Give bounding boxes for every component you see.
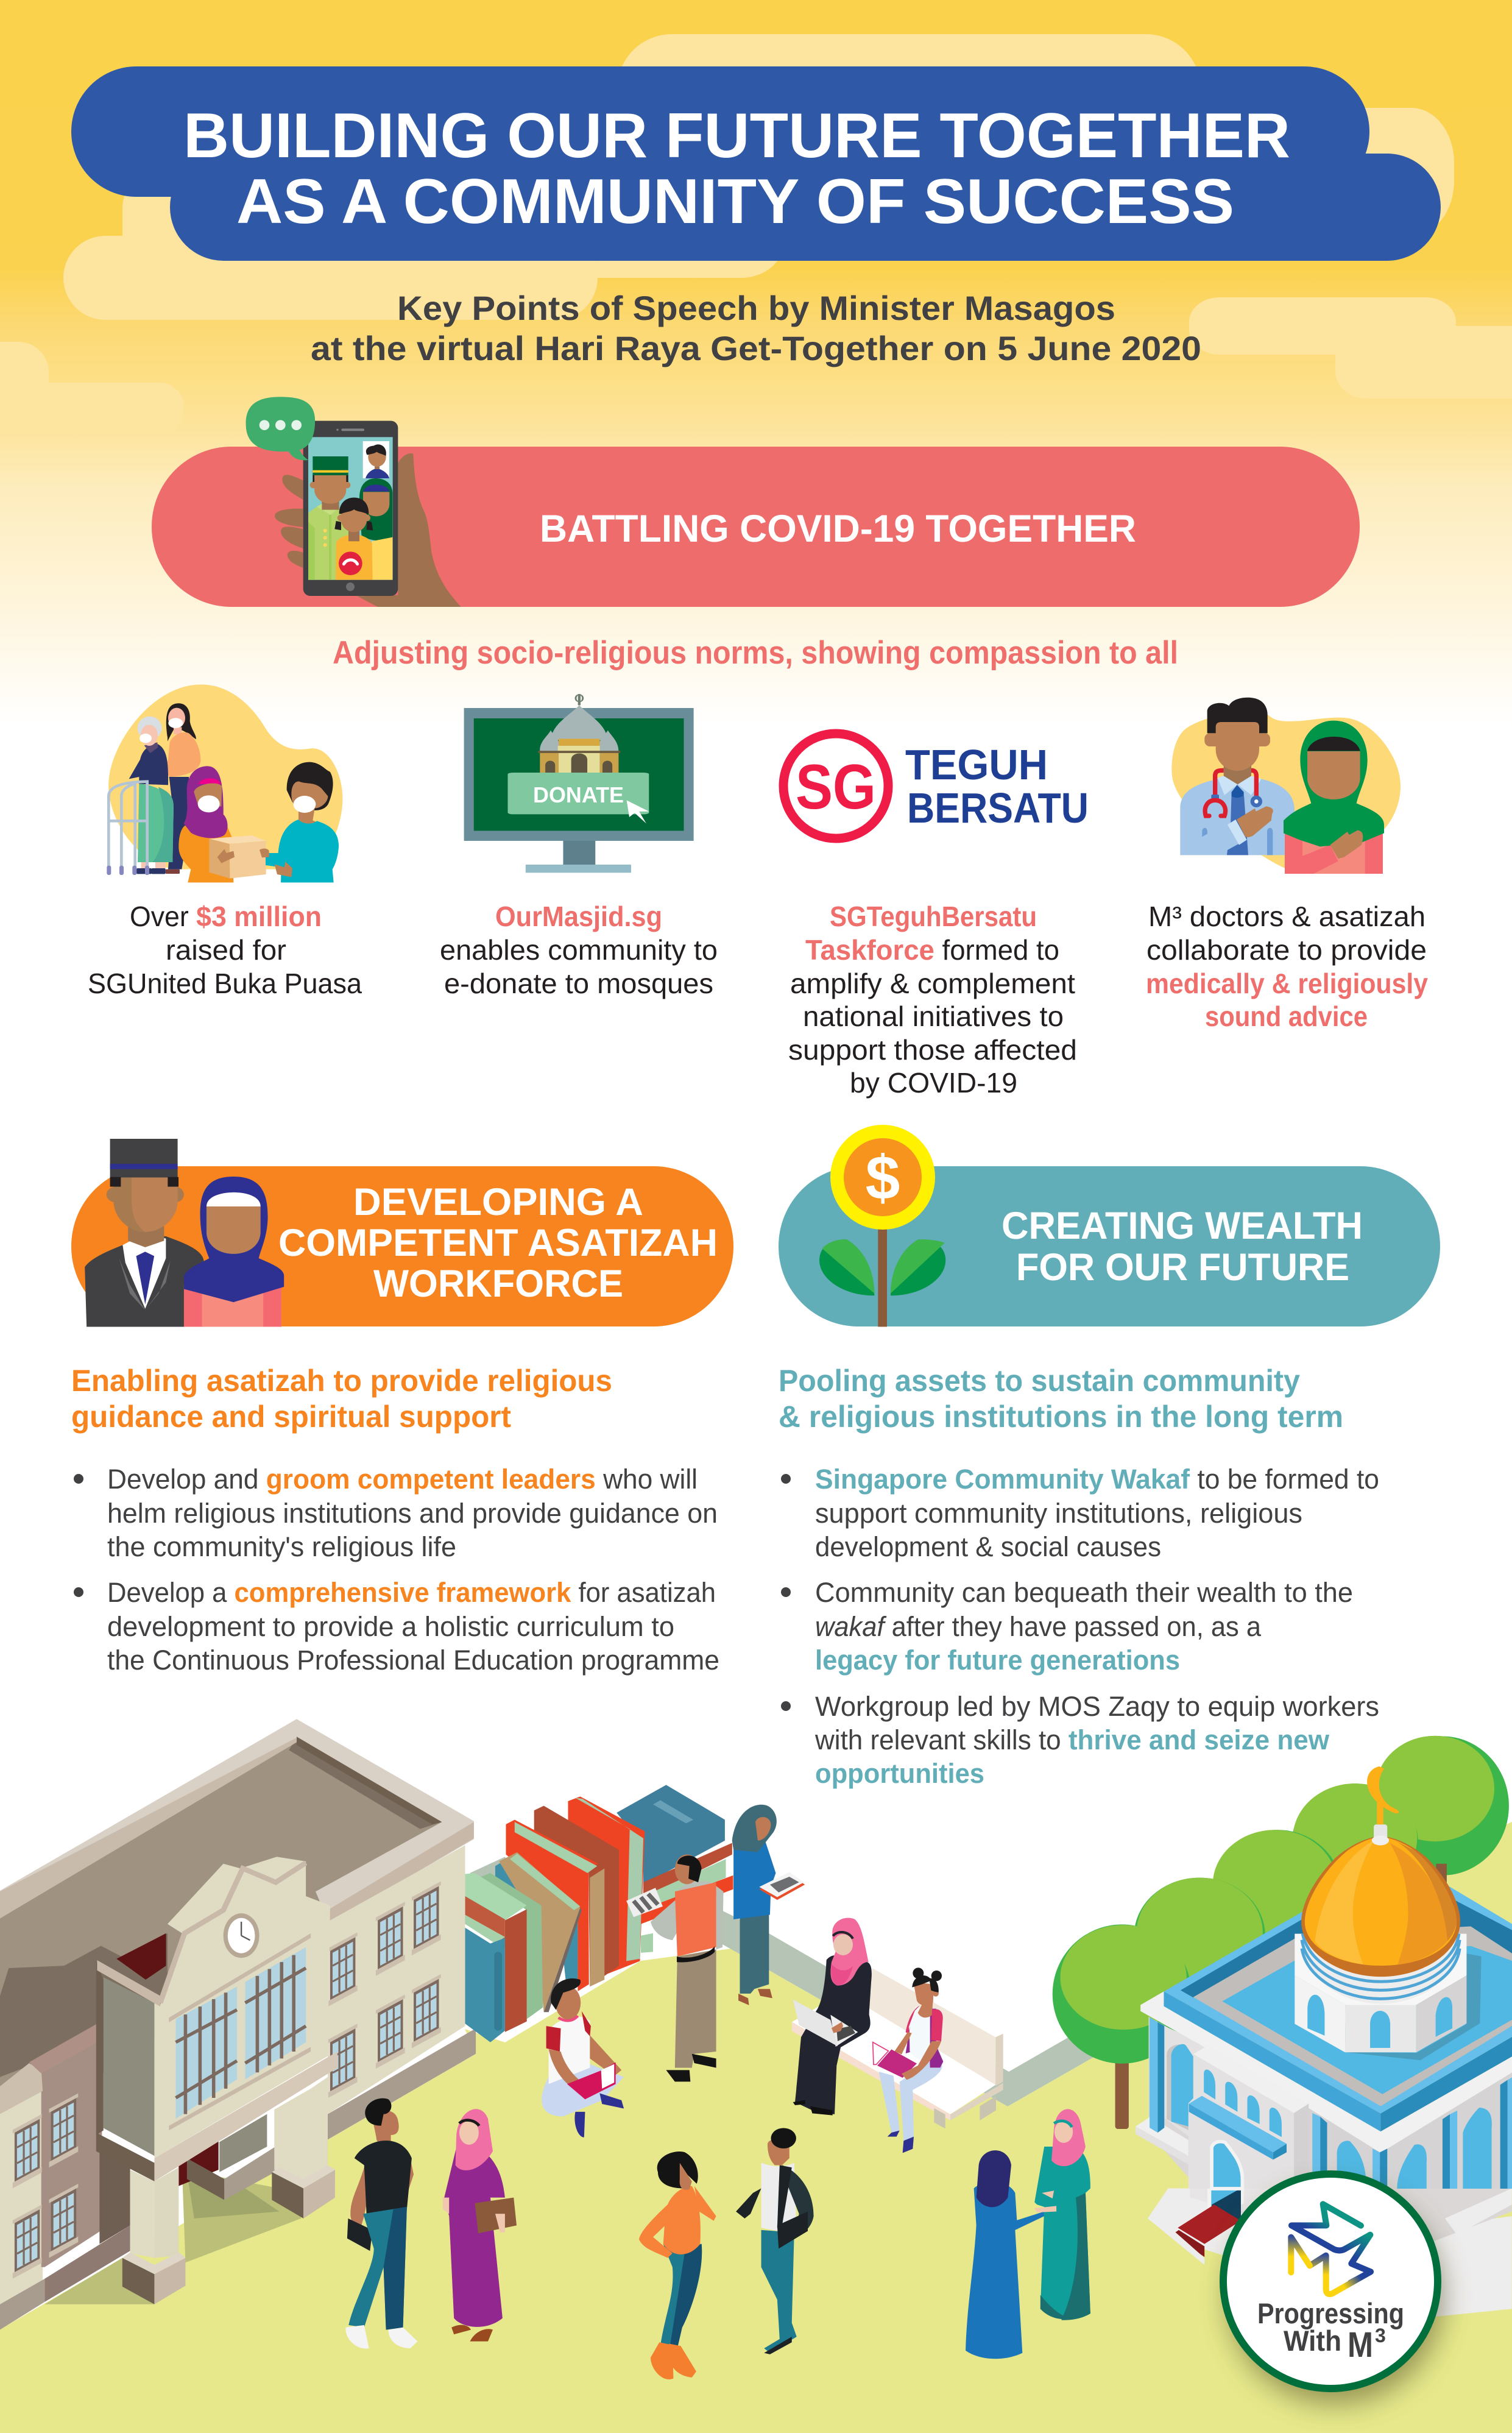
bullet list: asatizah development [74,1464,719,1676]
text: m3 doctors and asatizah: medically & religiously [1146,968,1428,999]
text: over $3 million raised: Over $3 million [130,901,322,932]
bullet list: wealth creation: with relevant skills to thrive and seize new [814,1724,1330,1755]
logo badge: progressing with m3: With [1284,2325,1341,2357]
bench with two seated women [792,1918,1003,2153]
title banner: BUILDING OUR FUTURE TOGETHER [183,101,1290,171]
subtitle [311,289,1201,367]
people: two women talking [966,2109,1090,2359]
banner: creating wealth for our future: CREATING WEALTH [1002,1205,1363,1247]
text: ourmasjid.sg: enables community to [440,934,718,966]
bullet list: asatizah development: Develop a comprehensive framework for asatizah [107,1577,716,1608]
bullet list: asatizah development: helm religious institutions and provide guidance on [107,1498,718,1529]
bullet list: wealth creation: Workgroup led by MOS Zaqy to equip workers [815,1691,1379,1722]
logo badge: progressing with m3: M [1348,2325,1373,2365]
icon: donate screen with mosque: DONATE [533,782,624,807]
text: sgteguhbersatu taskforce: support those affected [788,1034,1077,1066]
subheading: enabling asatizah: Enabling asatizah to provide religious [71,1364,612,1398]
banner: battling covid-19 together: BATTLING COVID-19 TOGETHER [540,508,1136,550]
logo: SG Teguh Bersatu: BERSATU [907,784,1089,832]
text: sgteguhbersatu taskforce: SGTeguhBersatu [830,901,1037,932]
subtitle: Key Points of Speech by Minister Masagos [397,289,1115,327]
text: ourmasjid.sg: e-donate to mosques [444,968,713,999]
logo badge: progressing with m3 [1223,2174,1444,2404]
person: man in orange vest reading [626,1855,724,2081]
text: sgteguhbersatu taskforce: national initiatives to [803,1000,1064,1032]
icon: coin flower plant: $ [866,1143,900,1213]
text: ourmasjid.sg [440,901,718,999]
subheading: pooling assets: & religious institutions in the long term [779,1400,1343,1434]
ground [0,1822,1512,2433]
text: ourmasjid.sg: OurMasjid.sg [495,901,662,932]
banner: developing a competent asatizah workforce: COMPETENT ASATIZAH [278,1222,718,1264]
banner: creating wealth for our future: FOR OUR FUTURE [1016,1246,1349,1289]
bullet list: asatizah development: development to provide a holistic curriculum to [107,1611,674,1642]
bullet list: wealth creation: Singapore Community Wakaf to be formed to [815,1464,1379,1495]
banner: developing a competent asatizah workforce [71,1166,733,1326]
text: m3 doctors and asatizah: collaborate to provide [1146,934,1427,966]
bullet list: wealth creation: development & social causes [815,1531,1161,1562]
icon: donate screen with mosque [464,694,694,873]
person: man in black shirt with tablet [345,2098,417,2348]
logo: SG Teguh Bersatu: SG [796,752,876,823]
banner: developing a competent asatizah workforce: WORKFORCE [373,1263,623,1305]
text: over $3 million raised [88,901,362,999]
bullet list: asatizah development: Develop and groom competent leaders who will [107,1464,698,1495]
text: over $3 million raised: SGUnited Buka Puasa [88,968,362,999]
logo: SG Teguh Bersatu: TEGUH [905,741,1048,788]
subheading: enabling asatizah [71,1364,612,1434]
bullet list: asatizah development: the community's religious life [107,1531,456,1562]
bullet list: wealth creation: support community institutions, religious [815,1498,1302,1529]
bullet list: wealth creation: opportunities [815,1758,984,1789]
banner: battling covid-19 together [152,447,1360,607]
title banner [71,66,1441,261]
text: over $3 million raised: raised for [166,934,286,966]
text: sgteguhbersatu taskforce: Taskforce formed to [805,934,1059,966]
bullet list: wealth creation: wakaf after they have passed on, as a [815,1611,1262,1642]
title banner: AS A COMMUNITY OF SUCCESS [236,166,1234,237]
text: m3 doctors and asatizah: sound advice [1205,1000,1368,1032]
text: sgteguhbersatu taskforce [788,901,1077,1099]
back wall [721,1910,1100,2106]
illustration: mosque [1136,1766,1512,2318]
subheading: enabling asatizah: guidance and spiritual support [71,1400,511,1434]
bullet list: wealth creation [781,1464,1379,1789]
illustration: row of books [465,1785,733,2042]
logo badge: progressing with m3: Progressing [1257,2297,1404,2329]
person: man with backpack [736,2128,814,2354]
section tagline: Adjusting socio-religious norms, showing compassion to all [333,635,1178,671]
person: woman in blue with book [732,1805,805,2005]
banner: creating wealth for our future [779,1166,1440,1326]
text: sgteguhbersatu taskforce: by COVID-19 [850,1067,1017,1099]
sky gradient background with clouds [0,0,1512,725]
subheading: pooling assets [779,1364,1343,1434]
text: m3 doctors and asatizah: M³ doctors & asatizah [1148,901,1425,932]
subheading: pooling assets: Pooling assets to sustain community [779,1364,1300,1398]
subtitle: at the virtual Hari Raya Get-Together on 5 June 2020 [311,329,1201,367]
text: sgteguhbersatu taskforce: amplify & complement [790,968,1075,999]
logo: SG Teguh Bersatu [783,734,1089,838]
icon: coin flower plant [819,1125,945,1326]
person: woman in purple dress with folder [443,2109,517,2342]
icon: doctor and asatizah [1171,698,1401,874]
trees [1053,1736,1509,2129]
icon: hand holding phone on video call [246,397,461,607]
icon: asatizah man and woman [85,1139,284,1326]
person: woman in orange on phone [639,2151,716,2379]
bullet list: wealth creation: legacy for future generations [815,1645,1180,1676]
text: m3 doctors and asatizah [1146,901,1428,1032]
person: seated student with pink book [542,1978,624,2137]
icon: people handing over donation with masks [107,684,342,882]
logo badge: progressing with m3: 3 [1375,2325,1386,2346]
bullet list: wealth creation: Community can bequeath their wealth to the [815,1577,1353,1608]
illustration: school building [0,1719,476,2330]
banner: developing a competent asatizah workforce: DEVELOPING A [353,1181,643,1224]
bullet list: asatizah development: the Continuous Professional Education programme [107,1645,719,1676]
